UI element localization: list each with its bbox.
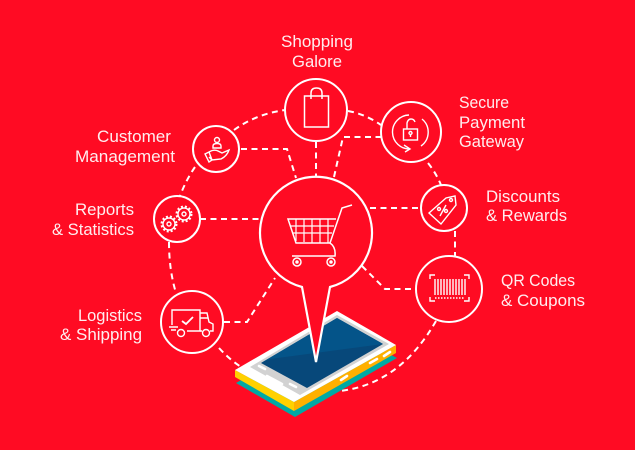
node: shopping galore <box>285 79 347 141</box>
label: qr codes and coupons: & Coupons <box>501 292 585 310</box>
node: qr codes <box>416 256 482 322</box>
label: customer management <box>75 128 175 166</box>
icon: cart <box>288 205 352 266</box>
label: customer management: Management <box>75 148 175 166</box>
label: discounts and rewards: Discounts <box>486 188 560 206</box>
central cart bubble <box>260 177 372 362</box>
icon: gears <box>162 206 192 232</box>
label: shopping galore: Shopping <box>281 33 353 51</box>
icon: lock <box>392 115 428 152</box>
label: reports and statistics: Reports <box>75 201 134 219</box>
node: logistics <box>161 291 223 353</box>
label: discounts and rewards <box>486 188 567 225</box>
label: logistics and shipping: & Shipping <box>60 326 142 344</box>
label: secure payment gateway: Payment <box>459 114 525 132</box>
label: shopping galore <box>281 33 353 71</box>
label: reports and statistics <box>52 201 134 239</box>
node: reports <box>154 196 200 242</box>
label: secure payment gateway: Secure <box>459 94 509 112</box>
label: customer management: Customer <box>97 128 172 146</box>
icon: barcode <box>430 275 469 301</box>
icon: hand <box>205 138 229 162</box>
label: discounts and rewards: & Rewards <box>486 207 567 225</box>
label: reports and statistics: & Statistics <box>52 221 134 239</box>
node: customer management <box>193 126 239 172</box>
icon: price tag <box>429 196 456 224</box>
label: secure payment gateway: Gateway <box>459 133 525 151</box>
node: secure payment <box>381 102 441 162</box>
phone <box>235 311 397 417</box>
icon: truck <box>169 310 213 336</box>
label: qr codes and coupons: QR Codes <box>501 272 575 290</box>
label: secure payment gateway <box>459 94 525 151</box>
label: logistics and shipping: Logistics <box>78 307 142 325</box>
label: logistics and shipping <box>60 307 142 344</box>
node: discounts <box>421 185 467 231</box>
icon: bag <box>304 88 328 127</box>
label: qr codes and coupons <box>501 272 585 310</box>
label: shopping galore: Galore <box>292 53 342 71</box>
